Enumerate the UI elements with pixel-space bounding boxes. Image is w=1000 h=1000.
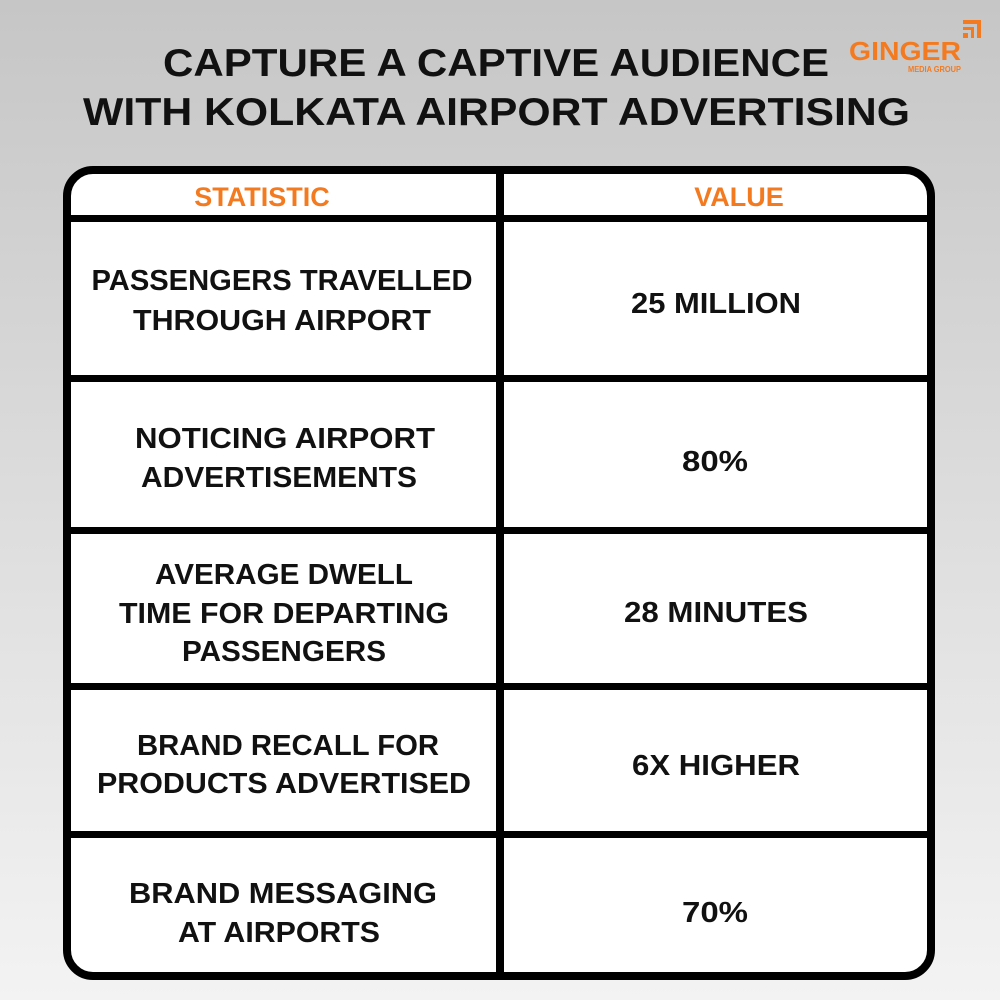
row 3: TIME FOR DEPARTING — [119, 598, 449, 630]
row 4: BRAND RECALL FOR — [137, 730, 439, 762]
row 4 — [97, 730, 800, 800]
row 2 — [135, 423, 748, 494]
logo: ginger media group: GINGER — [849, 36, 961, 66]
header row: VALUE — [694, 182, 784, 212]
table — [67, 170, 931, 976]
row 1 — [92, 265, 801, 337]
row 3: 28 MINUTES — [624, 597, 808, 629]
row 5: AT AIRPORTS — [178, 917, 380, 949]
row 4: PRODUCTS ADVERTISED — [97, 768, 471, 800]
row 2: 80% — [682, 446, 748, 478]
row 1: 25 MILLION — [631, 288, 801, 320]
header row: STATISTIC — [194, 182, 330, 212]
row 3: PASSENGERS — [182, 636, 386, 668]
logo: ginger media group — [849, 20, 981, 74]
row 3: AVERAGE DWELL — [155, 559, 413, 591]
row 5: BRAND MESSAGING — [129, 878, 437, 910]
header row — [194, 182, 784, 212]
title — [83, 42, 910, 134]
row 5 — [129, 878, 748, 949]
row 1: THROUGH AIRPORT — [133, 305, 431, 337]
row 3 — [119, 559, 808, 668]
row 5: 70% — [682, 897, 748, 929]
row 2: ADVERTISEMENTS — [141, 462, 417, 494]
row 4: 6X HIGHER — [632, 750, 800, 782]
title: WITH KOLKATA AIRPORT ADVERTISING — [83, 91, 910, 134]
row 1: PASSENGERS TRAVELLED — [92, 265, 472, 297]
title: CAPTURE A CAPTIVE AUDIENCE — [163, 42, 829, 85]
logo: ginger media group: MEDIA GROUP — [908, 65, 962, 74]
row 2: NOTICING AIRPORT — [135, 423, 435, 455]
